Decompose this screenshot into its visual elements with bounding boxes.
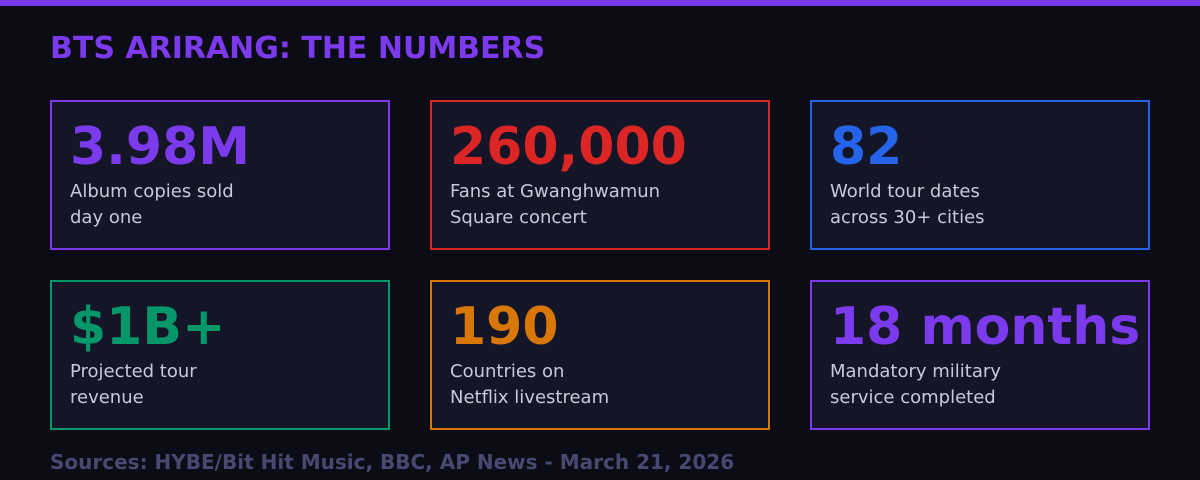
card: album copies: 3.98M <box>70 117 250 177</box>
card: tour dates: 82 <box>830 117 902 177</box>
card: countries <box>431 281 769 429</box>
card: military service: 18 months <box>830 297 1140 357</box>
card: countries: 190 <box>450 297 559 357</box>
card: album copies: Album copies sold <box>70 181 234 202</box>
card: fans: Square concert <box>450 207 587 228</box>
card: revenue: $1B+ <box>70 297 226 357</box>
top accent bar <box>0 0 1200 6</box>
card: tour dates <box>811 101 1149 249</box>
card: military service: service completed <box>830 387 996 408</box>
card: countries: Countries on <box>450 361 564 382</box>
card: album copies <box>51 101 389 249</box>
card: revenue: Projected tour <box>70 361 197 382</box>
card: album copies: day one <box>70 207 142 228</box>
card: tour dates: across 30+ cities <box>830 207 985 228</box>
card: fans: 260,000 <box>450 117 687 177</box>
card: fans: Fans at Gwanghwamun <box>450 181 660 202</box>
title: BTS ARIRANG: THE NUMBERS <box>50 31 545 66</box>
card: fans <box>431 101 769 249</box>
card: countries: Netflix livestream <box>450 387 609 408</box>
card: revenue <box>51 281 389 429</box>
card: military service <box>811 281 1149 429</box>
sources footer: Sources: HYBE/Bit Hit Music, BBC, AP News - March 21, 2026 <box>50 450 734 474</box>
card: tour dates: World tour dates <box>830 181 980 202</box>
card: revenue: revenue <box>70 387 144 408</box>
card: military service: Mandatory military <box>830 361 1001 382</box>
